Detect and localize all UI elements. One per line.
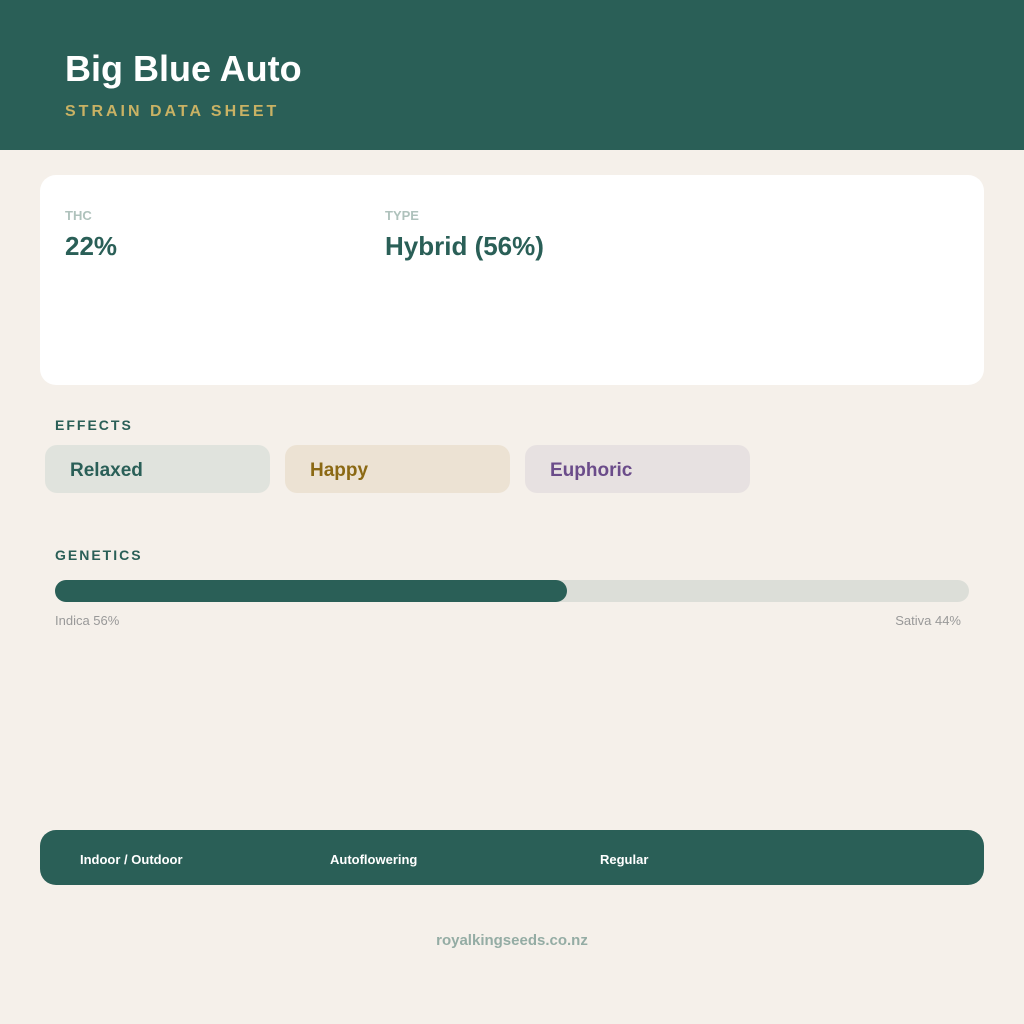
- title: Big Blue Auto: [65, 48, 302, 89]
- heading: genetics: GENETICS: [55, 547, 143, 563]
- bar label: indica: Indica 56%: [55, 613, 119, 628]
- effect tag: relaxed: [45, 445, 270, 493]
- effect tag: happy: Happy: [310, 460, 368, 481]
- website: royalkingseeds.co.nz: [436, 932, 588, 949]
- genetics bar: [55, 580, 969, 602]
- effect tag: relaxed: Relaxed: [70, 460, 143, 481]
- stat label: THC: THC: [65, 208, 92, 223]
- heading: effects: EFFECTS: [55, 417, 133, 433]
- effect tag: euphoric: [525, 445, 750, 493]
- header band: [0, 0, 1024, 150]
- subtitle: STRAIN DATA SHEET: [65, 103, 279, 120]
- stat value: type: Hybrid (56%): [385, 231, 544, 261]
- footer bar: [40, 830, 984, 885]
- stat label: type: TYPE: [385, 208, 419, 223]
- bar label: sativa: Sativa 44%: [895, 613, 961, 628]
- indica fill: [55, 580, 567, 602]
- setting: seed type: Regular: [600, 852, 648, 867]
- effect tag: euphoric: Euphoric: [550, 460, 632, 481]
- setting: environment: Indoor / Outdoor: [80, 852, 183, 867]
- effect tag: happy: [285, 445, 510, 493]
- panel: stats card: [40, 175, 984, 385]
- stat value: THC: 22%: [65, 231, 117, 261]
- setting: flowering: Autoflowering: [330, 852, 417, 867]
